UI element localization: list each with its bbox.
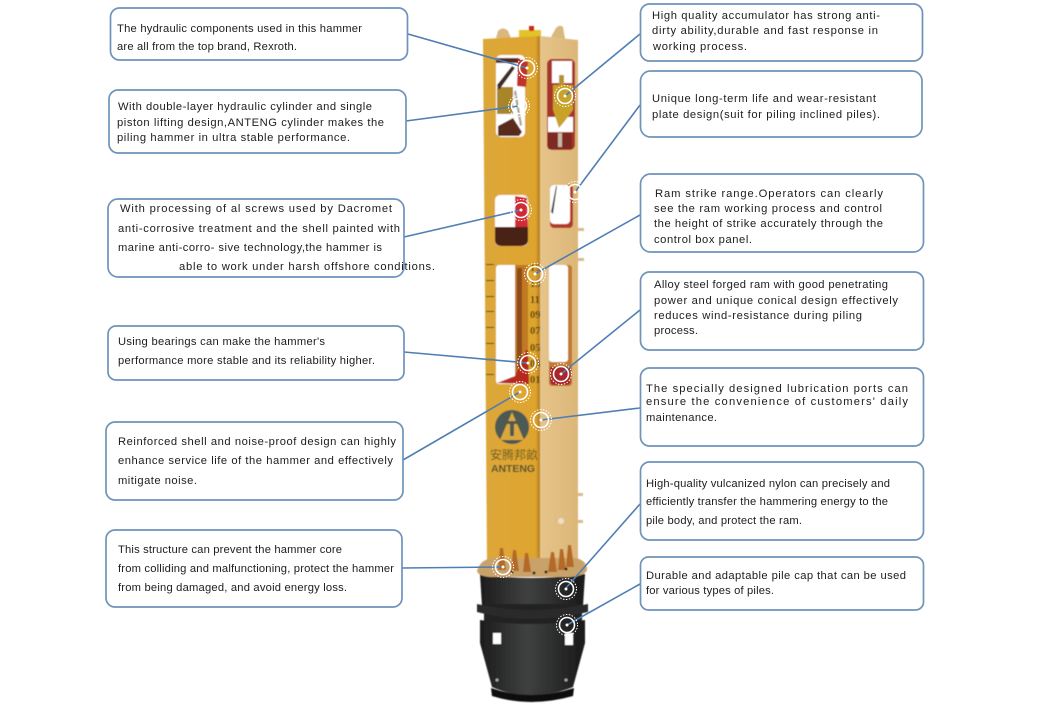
right window: lower <box>549 265 572 386</box>
callout: accumulator <box>640 4 922 61</box>
leader lines <box>402 34 640 625</box>
callout: vulcanized nylon: efficiently transfer the hammering energy to the <box>646 496 888 508</box>
scale numbers: 15 <box>530 263 540 274</box>
callout: Dacromet treatment: With processing of al screws used by Dacromet <box>120 203 393 215</box>
callout: structure protection <box>106 530 402 607</box>
callout: bearings: performance more stable and its reliability higher. <box>118 355 375 367</box>
left window: upper <box>496 55 528 137</box>
tower left face <box>483 36 540 562</box>
callout: Dacromet treatment: able to work under harsh offshore conditions. <box>179 261 435 273</box>
callout: alloy steel ram: reduces wind-resistance during piling <box>654 310 862 322</box>
callout: accumulator: working process. <box>652 41 747 53</box>
callout: lubrication ports <box>640 368 924 446</box>
marker rings <box>492 58 586 636</box>
callout: pile cap: Durable and adaptable pile cap that can be used <box>646 570 906 582</box>
callout: bearings <box>108 326 404 380</box>
callout: alloy steel ram <box>640 272 924 350</box>
callout: wear-resistant plate <box>640 71 922 137</box>
callout: accumulator: High quality accumulator has strong anti- <box>652 10 880 22</box>
callout: Rexroth hydraulic components: are all from the top brand, Rexroth. <box>117 41 297 53</box>
callout: pile cap: for various types of piles. <box>646 585 774 597</box>
left window: middle <box>495 195 528 246</box>
logo <box>490 410 538 475</box>
callout: structure protection: from colliding and malfunctioning, protect the hammer <box>118 563 394 575</box>
callout: reinforced shell: Reinforced shell and noise-proof design can highly <box>118 436 396 448</box>
callout: pile cap <box>640 557 924 610</box>
callout: alloy steel ram: power and unique conical design effectively <box>654 295 898 307</box>
left window: lower with scale <box>496 265 529 384</box>
tower right face <box>540 36 578 565</box>
scale ticks <box>486 264 494 375</box>
scale numbers: 05 <box>530 343 540 354</box>
callout: vulcanized nylon: pile body, and protect the ram. <box>646 515 802 527</box>
callout: lubrication ports: ensure the convenience of customers' daily <box>646 396 908 408</box>
logo: ANTENG <box>491 463 535 475</box>
callout: Dacromet treatment: marine anti-corro- sive technology,the hammer is <box>118 242 382 254</box>
callout: ram strike range <box>640 174 924 252</box>
logo: 安腾邦畝 <box>490 447 538 462</box>
callout: reinforced shell <box>106 422 403 500</box>
side bolts <box>558 228 584 524</box>
callout: vulcanized nylon: High-quality vulcanized nylon can precisely and <box>646 478 890 490</box>
callout: double-layer cylinder: piling hammer in ultra stable performance. <box>117 132 350 144</box>
callout: Rexroth hydraulic components: The hydraulic components used in this hammer <box>117 23 362 35</box>
black cap body <box>477 574 588 702</box>
callout: wear-resistant plate: Unique long-term life and wear-resistant <box>652 93 877 105</box>
scale numbers: 03 <box>530 359 540 370</box>
scale numbers: 07 <box>530 326 540 337</box>
callout: wear-resistant plate: plate design(suit for piling inclined piles). <box>652 109 880 121</box>
callout: ram strike range: the height of strike accurately through the <box>654 218 883 230</box>
callout: reinforced shell: enhance service life of the hammer and effectively <box>118 455 393 467</box>
callout: Dacromet treatment: anti-corrosive treatment and the shell painted with <box>118 223 400 235</box>
callout: reinforced shell: mitigate noise. <box>118 475 197 487</box>
top fittings <box>496 26 565 39</box>
callout: lubrication ports: maintenance. <box>646 412 717 424</box>
callout: Rexroth hydraulic components <box>110 8 408 60</box>
callout: alloy steel ram: Alloy steel forged ram with good penetrating <box>654 279 888 291</box>
callout: ram strike range: see the ram working process and control <box>654 203 882 215</box>
callout: Dacromet treatment <box>108 199 435 277</box>
callout: bearings: Using bearings can make the hammer's <box>118 336 325 348</box>
callout: vulcanized nylon <box>640 462 924 540</box>
callout: lubrication ports: The specially designed lubrication ports can <box>646 383 908 395</box>
callout: ram strike range: Ram strike range.Operators can clearly <box>655 188 883 200</box>
callout: structure protection: This structure can prevent the hammer core <box>118 544 342 556</box>
callout: structure protection: from being damaged, and avoid energy loss. <box>118 582 347 594</box>
callout: double-layer cylinder: With double-layer hydraulic cylinder and single <box>118 101 372 113</box>
callout: double-layer cylinder: piston lifting design,ANTENG cylinder makes the <box>117 117 384 129</box>
scale numbers: 09 <box>530 310 540 321</box>
right window: middle <box>550 185 573 228</box>
callout: double-layer cylinder <box>109 90 406 153</box>
callout: accumulator: dirty ability,durable and fast response in <box>652 25 878 37</box>
scale numbers: 13 <box>530 279 540 290</box>
callout: alloy steel ram: process. <box>654 325 698 337</box>
callout: ram strike range: control box panel. <box>654 234 752 246</box>
illustration: hydraulic piling hammer <box>477 26 588 702</box>
scale numbers: 01 <box>530 375 540 386</box>
scale numbers <box>530 263 540 386</box>
right window: accumulator <box>547 59 575 150</box>
scale numbers: 11 <box>530 295 540 306</box>
lower flange with cones <box>477 545 587 577</box>
